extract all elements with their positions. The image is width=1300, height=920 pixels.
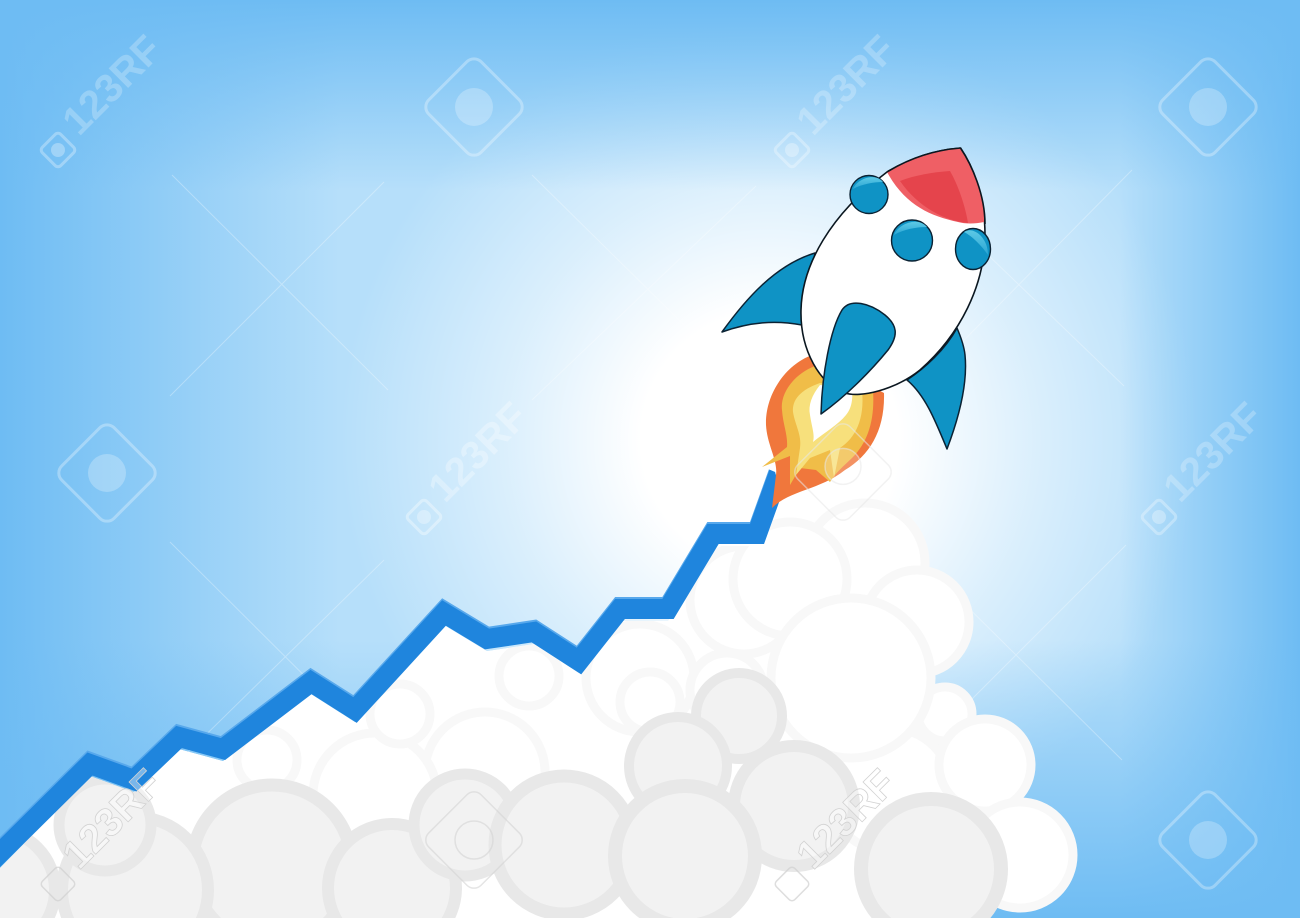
- watermark: 123RF bottom centre: 123RF: [788, 761, 904, 877]
- watermark logo: [1156, 788, 1260, 892]
- watermark: 123RF bottom left: 123RF: [54, 761, 170, 877]
- watermark logo: [422, 788, 526, 892]
- center fin: [821, 303, 895, 414]
- watermark logo: [1156, 55, 1260, 159]
- right fin: [907, 328, 966, 449]
- watermark: 123RF top centre: 123RF: [788, 27, 904, 143]
- flame: [762, 355, 884, 508]
- cloud mass beneath the chart line: [0, 503, 1073, 920]
- grey front clouds: [0, 673, 1001, 920]
- watermark logo: [422, 55, 526, 159]
- rocket: [722, 148, 990, 508]
- red nose cone: [887, 148, 985, 224]
- rocket body: [801, 148, 985, 394]
- line chart: rising blue trend line: [0, 468, 780, 861]
- porthole 3: [956, 228, 990, 270]
- white back clouds: [509, 525, 1078, 912]
- watermark logo: [791, 420, 895, 524]
- watermark: 123RF top left: 123RF: [54, 27, 170, 143]
- watermark: 123RF middle centre: 123RF: [420, 394, 536, 510]
- porthole 1: [850, 176, 888, 214]
- watermark logo: [55, 421, 159, 525]
- left fin: [722, 253, 815, 332]
- white fill under the line: [0, 600, 872, 918]
- watermark: 123RF middle right: 123RF: [1155, 394, 1271, 510]
- porthole 2: [892, 220, 932, 261]
